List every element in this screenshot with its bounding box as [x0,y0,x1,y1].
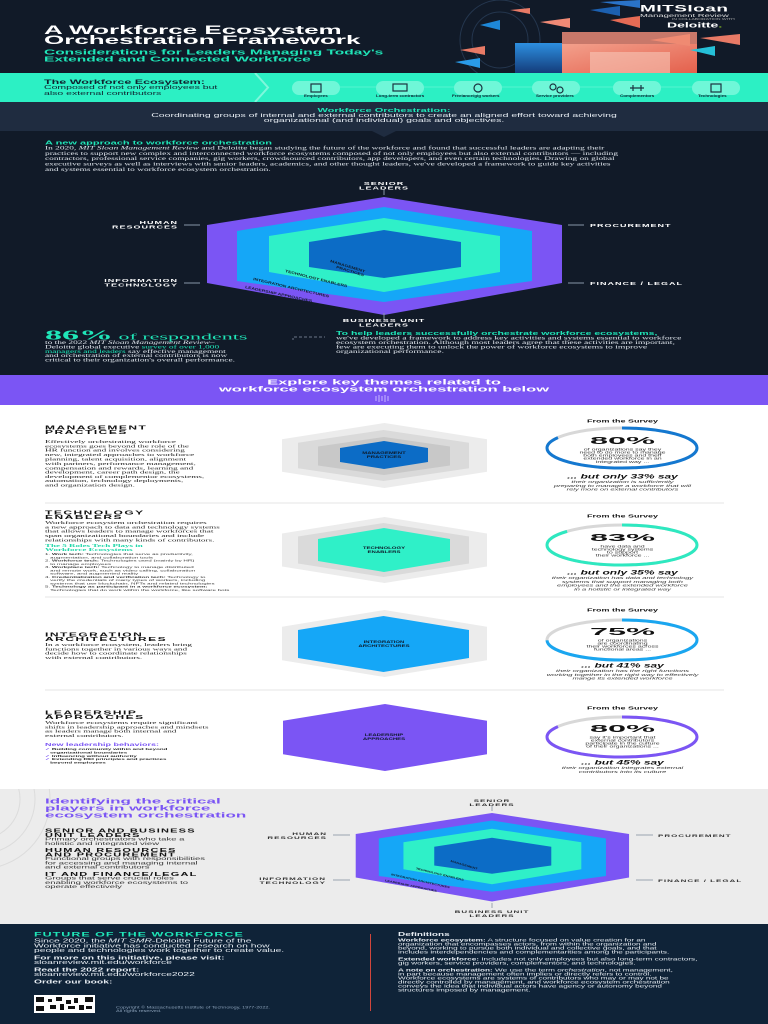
chart: survey 80%: both employees and their [583,454,662,457]
text: initiative info: Read the 2022 report: [34,967,139,973]
chart: framework hexagon: HUMAN [140,220,178,225]
chart: framework hexagon: LEADERS [359,186,409,191]
icons: contributor types: Employees [304,94,328,98]
list: tech roles: Technologies that do work within the workforce, like software bots [50,588,229,592]
list: tech roles: 4. Credentialization and verification tech: Technology to [45,575,206,579]
text block: player groups: holistic and integrated view [45,841,159,846]
text: that allows leaders to manage workforces that [45,529,213,534]
chart: framework hexagon: TECHNOLOGY ENABLERS [285,269,348,288]
list: behaviors: ✓ Influencing without authority [45,754,137,758]
text: HR function and involves considering [45,448,185,453]
text: initiative info: sloanreview.mit.edu/workforce [34,960,172,966]
chart: players hexagon: INTEGRATION ARCHITECTURES [391,873,451,889]
chart: survey 75%: are coordinating [597,642,648,645]
chart: framework hexagon: BUSINESS UNIT [343,318,425,323]
chart: survey 80%: integrated way ... [596,461,649,464]
text block: intro paragraph: practices to support new complex and interconnected workforce ecosystems composed of not only employees but also external contributors — including [45,151,618,156]
callout: 86% of respondents: to the 2022 MIT Sloan Management Review– [45,340,215,346]
chart: survey 75%: of organizations [598,639,647,642]
list: tech roles: 1. Work tech: Technologies that serve as productivity, [45,552,193,556]
chart: players hexagon: HUMAN [292,832,327,836]
chart: framework hexagon: FINANCE / LEGAL [590,281,683,286]
chart: survey 75%: From the Survey [587,607,658,612]
text block: framework purpose: ecosystem orchestration. Although most leaders agree that these activities are important, [336,340,675,346]
chart: survey 80% culture [546,705,698,774]
text: initiative info: sloanreview.mit.edu/workforce2022 [34,972,195,978]
text: initiative info: people and technologies work together to create value. [34,948,284,954]
text block: player groups: IT AND FINANCE/LEGAL [45,871,198,877]
chart: survey 80%: ... but only 33% say [567,473,678,480]
text: functions together in various ways and [45,647,187,651]
heading: ENABLERS [45,514,123,521]
text block: intro paragraph: In 2020, MIT Sloan Management Review and Deloitte began studying the future of the workforce and found that successful leaders are adapting their [45,146,604,151]
chart: survey 80%: extended workforce in an [583,457,662,461]
panel: technology enablers [45,509,230,592]
chart: players hexagon: INFORMATION [259,877,326,881]
callout: 86% of respondents: Deloitte global executive survey of over 1,000 [45,345,219,350]
text: Workforce ecosystem orchestration requires [45,521,207,525]
chart: survey 80% culture: contributors into its culture [579,769,666,774]
chart: players hexagon: SENIOR [474,799,510,803]
text block: definitions: beyond, working to pursue both individual and collective goals, and that [398,946,657,950]
text: span organizational boundaries and include [45,534,204,538]
text block: definitions: structures imposed by management. [398,988,530,992]
heading: future of the workforce: FUTURE OF THE WORKFORCE [34,931,244,938]
text [45,721,209,738]
text block: definitions: organization that encompasses actors, from within the organization and [398,942,657,946]
text block: framework purpose: organizational performance. [336,349,444,354]
text: decide how to coordinate relationships [45,651,187,656]
chart: framework hexagon: MANAGEMENT [330,259,366,273]
chart: survey 83%: their organization has data and technology [552,576,693,580]
text block: player groups: HUMAN RESOURCES [45,848,177,854]
text block: player groups: enabling workforce ecosystems to [45,880,188,885]
text: initiative info: Order our book: [34,979,112,985]
chart: survey 75%: their organization has the right functions [556,668,689,673]
list: behaviors: ✓ Extending DEI principles and practices [45,758,166,761]
text block: definitions: A note on orchestration: We use the term orchestration, not management, [398,968,673,972]
heading: ARCHITECTURES [45,636,167,643]
text block: framework purpose: To help leaders successfully orchestrate workforce ecosystems, [336,330,657,336]
chart: survey 83%: systems that support managing both [562,579,683,584]
text block: player groups: Groups that serve crucial roles [45,876,174,881]
icon: leadership hexagon: LEADERSHIP [365,733,404,737]
chart: framework hexagon: RESOURCES [112,225,178,230]
chart: survey 80%: preparing to manage a workforce that will [554,483,691,488]
title [44,23,360,47]
callout: 86% of respondents: 86% of respondents [45,328,247,343]
list: behaviors: ✓ Building community within and beyond [45,748,167,751]
list: behaviors [45,748,167,765]
text block: player groups: for accessing and managing internal [45,860,198,866]
list: tech roles: augmentation, and collaboration tools [50,556,153,559]
chart: players hexagon: RESOURCES [267,836,327,840]
icon: integration hexagon: ARCHITECTURES [358,644,411,648]
chart: framework hexagon: SENIOR [364,181,404,186]
chart: framework hexagon: LEADERSHIP APPROACHES [245,285,313,303]
heading: PRACTICES [45,429,128,436]
text: a new approach to data and technology systems [45,525,220,529]
text [45,440,204,488]
chart: players hexagon: LEADERS [469,803,515,807]
text block: definitions: gig workers, service providers, complementors, and technologies. [398,961,636,966]
chart: survey 83%: employees and the extended workforce [557,583,688,588]
icons: contributor types [292,81,740,98]
text [45,521,220,542]
text block: intro paragraph: and systems essential to workforce ecosystem orchestration. [45,167,271,172]
text: new, integrated approaches to workforce [45,453,194,457]
text block: player groups: AND PROCUREMENT [45,852,176,858]
banner: explore key themes: Explore key themes related to [267,378,501,386]
icons: contributor types: Complementors [620,94,654,98]
chart: survey 75%: functional areas ... [594,648,651,652]
panel: workforce orchestration definition: Workforce Orchestration: [317,108,451,114]
list: tech roles: 3. Workplace tech: Technology to manage distributed [45,566,194,569]
icon: leadership hexagon: APPROACHES [363,737,406,741]
icon: management hexagon: PRACTICES [367,455,402,459]
text: with external contributors. [45,656,142,660]
text: ecosystem definition: also external contributors [44,90,161,96]
chart: survey 80%: of organizations say they [584,448,661,451]
text: with partners, performance management, [45,461,196,466]
chart: survey 75%: ... but 41% say [581,662,664,669]
header band: IN COLLABORATION WITH [672,18,735,21]
chart: players hexagon: LEADERS [469,914,515,918]
text [45,643,192,660]
text block: definitions: directly controlled by management, and workforce ecosystem orchestration [398,980,670,984]
text block: definitions: conveys the idea that individual actors have agency or autonomy beyond [398,984,662,988]
list: tech roles: 5. Technology as participant in a workforce ecosystem: [45,585,208,588]
chart: framework hexagon [104,181,683,340]
chart: survey 80% culture: of their organizations ... [586,745,659,749]
text block: framework purpose [336,330,682,354]
heading [45,509,145,521]
chart: survey 80% culture: 80% [590,723,655,734]
text: Workforce ecosystems require significant [45,721,198,725]
chart: players hexagon: PROCUREMENT [658,834,732,838]
text block: intro paragraph: executive surveys as well as interviews with senior leaders, academics, and other thought leaders, we've developed a framework to guide key activities [45,162,611,167]
chart: survey 75%: 75% [590,626,655,637]
chart: players hexagon: MANAGEMENT [450,859,478,870]
chart: survey 83%: their workforce ... [596,554,649,558]
banner: explore key themes [0,375,768,405]
text block: intro paragraph [45,146,618,172]
text: relationships with many kinds of contributors. [45,538,214,542]
list: tech roles: software, and augmented reality [50,572,138,576]
header band: Management Review [640,13,729,18]
text: initiative info: Workforce initiative has conducted research on how [34,943,270,949]
banner: explore key themes: workforce ecosystem orchestration below [219,385,549,393]
text block: definitions: Workforce ecosystems are systems of contributors who may or may not be [398,976,669,980]
chart: players hexagon: TECHNOLOGY [260,881,326,885]
chart: survey 80% culture: say it's important that [590,736,655,739]
subheading: behaviors: New leadership behaviors: [45,742,159,747]
subtitle: Considerations for Leaders Managing Today's [44,49,383,56]
text: as leaders manage both internal and [45,729,176,734]
chart: survey 80% culture: participate in the culture [585,742,660,745]
text: copyright: Copyright © Massachusetts Institute of Technology, 1977-2022. [116,1006,270,1010]
panel: leadership approaches [45,709,209,765]
text: shifts in leadership approaches and mindsets [45,725,209,729]
text: external contributors. [45,734,124,738]
text block: definitions [398,932,697,992]
text block: definitions: Workforce ecosystem: A structure focused on value creation for an [398,938,645,942]
panel: integration architectures [45,631,192,660]
text: initiative info: For more on this initiative, please visit: [34,955,225,961]
panel: framework overview background (dark) [0,131,768,375]
text: initiative info [34,938,284,985]
icons: contributor types: Technologies [698,94,727,98]
chart: survey 83%: ... but only 35% say [567,569,678,576]
chart: survey 80%: their organization is sufficiently [571,480,674,484]
divider [370,934,371,1011]
heading: new approach: A new approach to workforce orchestration [45,140,272,146]
icon: integration hexagon: INTEGRATION [364,640,405,644]
text block: player groups: and external contributors [45,864,150,870]
text block: definitions: Definitions [398,932,450,938]
chart: survey 83%: technology systems [592,548,653,551]
text block: definitions: Extended workforce: Includes not only employees but also long-term contractors, [398,957,697,962]
text block: framework purpose: we've developed a framework to address key activities and systems essential to workforce [336,336,681,341]
chart: survey 80%: From the Survey [587,418,658,424]
chart: framework hexagon: PROCUREMENT [590,223,671,228]
text: ecosystem definition: The Workforce Ecosystem: [44,78,205,86]
callout: 86% of respondents: managers and leaders say effective management [45,349,226,354]
icons: contributor types: Service providers [536,94,574,98]
text: ecosystem definition: Composed of not only employees but [44,84,217,90]
separators [45,502,724,690]
list: tech roles: and remote work, such as video calling, collaboration [50,569,195,572]
text block: player groups: SENIOR AND BUSINESS [45,828,196,834]
text: ecosystems goes beyond the role of the [45,444,189,448]
chart: players hexagon: LEADERSHIP APPROACHES [385,879,438,893]
text: planning, talent acquisition, alignment [45,457,186,461]
heading: TECHNOLOGY [45,509,145,516]
chart: survey 75%: their workforces across [587,645,658,648]
text block: player groups: Primary orchestrators who take a [45,836,184,842]
list: behaviors: organizational boundaries [50,751,127,754]
text: Effectively orchestrating workforce [45,440,176,444]
text block: player groups: Functional groups with responsibilities [45,856,205,862]
chart: survey 83%: From the Survey [587,513,658,518]
text block: player groups: UNIT LEADERS [45,832,141,838]
text: development, career path design, the [45,470,180,474]
chart: survey 83%: in a holistic or integrated way [574,587,671,591]
chart: survey 80%: rely more on external contributors [567,487,678,492]
text block: intro paragraph: contractors, professional service companies, gig workers, crowdsourced contributors, app developers, and even certain technologies. Drawing on global [45,157,615,162]
heading: APPROACHES [45,714,145,721]
list: tech roles [45,552,230,592]
list: behaviors: beyond employees [50,761,106,765]
chart: survey 83%: 83% [590,532,655,543]
text block: framework purpose: few are executing them to unlock the power of workforce ecosystems to improve [336,344,647,350]
chart: players hexagon: TECHNOLOGY ENABLERS [416,867,465,882]
icon: technology hexagon: ENABLERS [368,550,401,554]
logo: MIT Sloan: MITSloan [640,4,728,14]
heading: INTEGRATION [45,631,143,638]
chart: survey 75%: mange its extended workforce [572,676,673,680]
text: In a workforce ecosystem, leaders bring [45,643,192,647]
icons: contributor types: Freelance/gig workers [452,94,500,98]
text: development of complementor ecosystems, [45,474,204,479]
icon: QR code [34,995,95,1013]
chart: framework hexagon: INTEGRATION ARCHITECTURES [253,277,330,298]
subheading: 5 roles: The 5 Roles Tech Plays in [45,544,143,548]
subtitle [44,49,383,63]
footer [0,924,768,1024]
header band [0,0,768,73]
text block: player groups [45,828,205,890]
text: ecosystem definition [44,78,218,96]
title: A Workforce Ecosystem [44,23,342,37]
chart: survey 80% culture: From the Survey [587,705,658,710]
chart: survey 83% [546,513,698,592]
chart: players hexagon: BUSINESS UNIT [455,910,529,914]
panel: workforce orchestration definition: organizational (and individual) goals and objectives. [264,118,504,124]
text: initiative info: Since 2020, the MIT SMR-Deloitte Future of the [34,938,252,944]
panel: workforce ecosystem band [0,73,768,102]
callout: 86% of respondents [45,328,247,363]
chart: survey 75%: working together in the right way to effectively [547,672,698,677]
chart: framework hexagon: INFORMATION [104,278,178,283]
text block: definitions: includes interdependencies and complementarities among the participants. [398,950,669,954]
chart: survey 80% culture: ... but 45% say [581,759,664,766]
chart: framework hexagon: LEADERS [359,323,409,328]
callout: 86% of respondents: and orchestration of external contributors is now [45,354,227,359]
chart: survey 80% culture: external contributors [591,739,654,742]
list: tech roles: 2. Workforce tech: Technologies used (mainly by HR) [45,559,194,562]
text: compensation and rewards, learning and [45,465,193,470]
icons: contributor types: Long-term contractors [376,94,424,98]
heading [45,709,145,721]
title: Orchestration Framework [44,33,360,47]
icon: technology hexagon: TECHNOLOGY [363,546,406,550]
panel: critical players [0,789,768,924]
panel: management practices [45,424,204,488]
arrow: down pointer [372,131,396,137]
subheading: 5 roles: Workforce Ecosystems [45,548,133,552]
list: tech roles: verify the credentials of many types of workers, including [50,578,205,582]
heading: identifying critical players: players in workforce [45,804,210,812]
chart: survey 80% [546,418,698,492]
icon: management hexagon: MANAGEMENT [362,451,406,455]
header artwork [455,0,740,73]
list: tech roles: systems that use blockchain, NFTs and related technologies [50,582,215,585]
heading: LEADERSHIP [45,709,137,716]
heading: identifying critical players: Identifying the critical [45,797,221,805]
chart: survey 83%: to support [607,551,638,554]
heading [45,631,167,643]
chart: framework hexagon: TECHNOLOGY [105,283,178,288]
callout: 86% of respondents: critical to their organization's overall performance. [45,358,235,363]
heading: identifying critical players: ecosystem orchestration [45,811,246,819]
chart: survey 80% culture: their organization integrates external [562,766,683,770]
panel: workforce orchestration definition: Coordinating groups of internal and external contributors to create an aligned effort toward achieving [151,112,617,118]
logo: Deloitte: Deloitte. [667,21,722,29]
subtitle: Extended and Connected Workforce [44,56,311,63]
text: automation, technology deployments, [45,478,183,483]
chart: survey 83%: have data and [600,545,645,548]
list: tech roles: to manage employees [50,562,111,566]
chart: framework hexagon: PRACTICES [336,265,365,277]
chart: survey 80%: need to do more to manage [579,451,666,454]
heading: MANAGEMENT [45,424,147,431]
text block: player groups: operate effectively [45,884,122,890]
heading: identifying critical players [45,797,246,819]
chart: players hexagon: FINANCE / LEGAL [658,879,742,883]
panel: workforce orchestration definition [0,102,768,131]
chart: survey 75% [546,607,699,680]
chart: survey 80%: 80% [590,435,655,446]
text: and organization design. [45,483,135,487]
text block: definitions: in part because management often implies or directly refers to control. [398,972,651,976]
subheading: 5 roles [45,544,143,552]
text: copyright: All rights reserved. [116,1010,162,1013]
text: copyright [116,1006,270,1013]
heading [45,424,147,436]
